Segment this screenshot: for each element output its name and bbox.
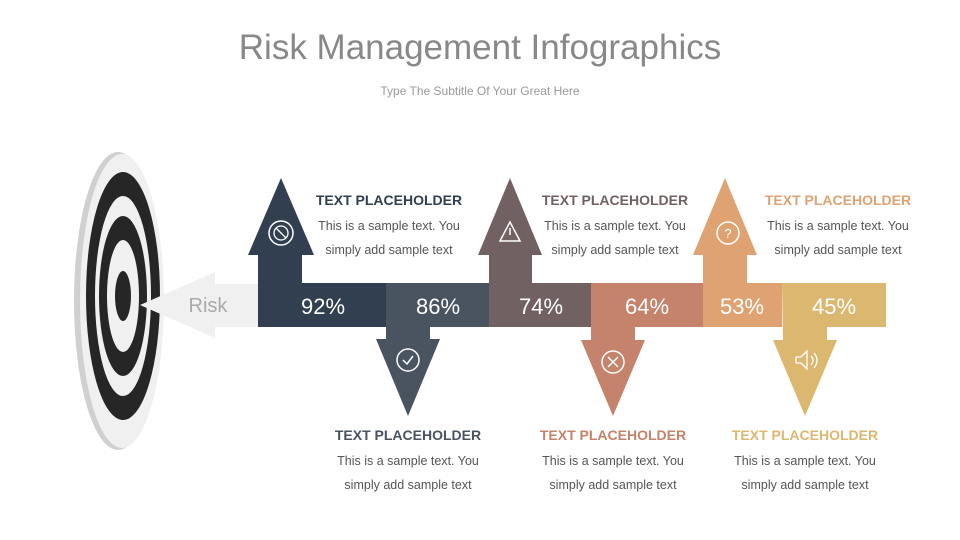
arrow 6 down 45% <box>773 283 886 416</box>
text block 6: TEXT PLACEHOLDER <box>732 427 878 443</box>
text block 4: This is a sample text. You <box>542 454 684 468</box>
arrow 2 down 86% <box>376 283 489 416</box>
arrow 3 up 74%: 74% <box>519 294 563 319</box>
text block 5 <box>765 192 911 257</box>
arrow 5 up 53%: 53% <box>720 294 764 319</box>
text block 3: simply add sample text <box>551 243 679 257</box>
text block 2: TEXT PLACEHOLDER <box>335 427 481 443</box>
text block 4: TEXT PLACEHOLDER <box>540 427 686 443</box>
text block 5: This is a sample text. You <box>767 219 909 233</box>
text block 2: This is a sample text. You <box>337 454 479 468</box>
text block 1: TEXT PLACEHOLDER <box>316 192 462 208</box>
target <box>74 152 164 450</box>
arrow 1 up 92% <box>248 178 386 327</box>
text block 6: This is a sample text. You <box>734 454 876 468</box>
arrow 2 down 86%: 86% <box>416 294 460 319</box>
text block 4: simply add sample text <box>549 478 677 492</box>
subtitle: Type The Subtitle Of Your Great Here <box>380 84 580 98</box>
text block 6: simply add sample text <box>741 478 869 492</box>
text block 2: simply add sample text <box>344 478 472 492</box>
text block 4 <box>540 427 686 492</box>
risk arrow: Risk <box>189 295 228 317</box>
text block 5: TEXT PLACEHOLDER <box>765 192 911 208</box>
text block 1 <box>316 192 462 257</box>
arrow 3 up 74% <box>478 178 591 327</box>
text block 2 <box>335 427 481 492</box>
arrow 4 down 64% <box>581 283 703 416</box>
text block 3: TEXT PLACEHOLDER <box>542 192 688 208</box>
text block 1: This is a sample text. You <box>318 219 460 233</box>
arrow 6 down 45%: 45% <box>812 294 856 319</box>
text block 3 <box>542 192 688 257</box>
text block 5: simply add sample text <box>774 243 902 257</box>
text block 6 <box>732 427 878 492</box>
arrow 1 up 92%: 92% <box>301 294 345 319</box>
title: Risk Management Infographics <box>239 28 721 67</box>
text block 1: simply add sample text <box>325 243 453 257</box>
text block 3: This is a sample text. You <box>544 219 686 233</box>
arrow 5 up 53% <box>693 178 782 327</box>
risk arrow <box>140 272 258 338</box>
arrow 5 up 53%: ? <box>724 226 732 241</box>
arrow 4 down 64%: 64% <box>625 294 669 319</box>
